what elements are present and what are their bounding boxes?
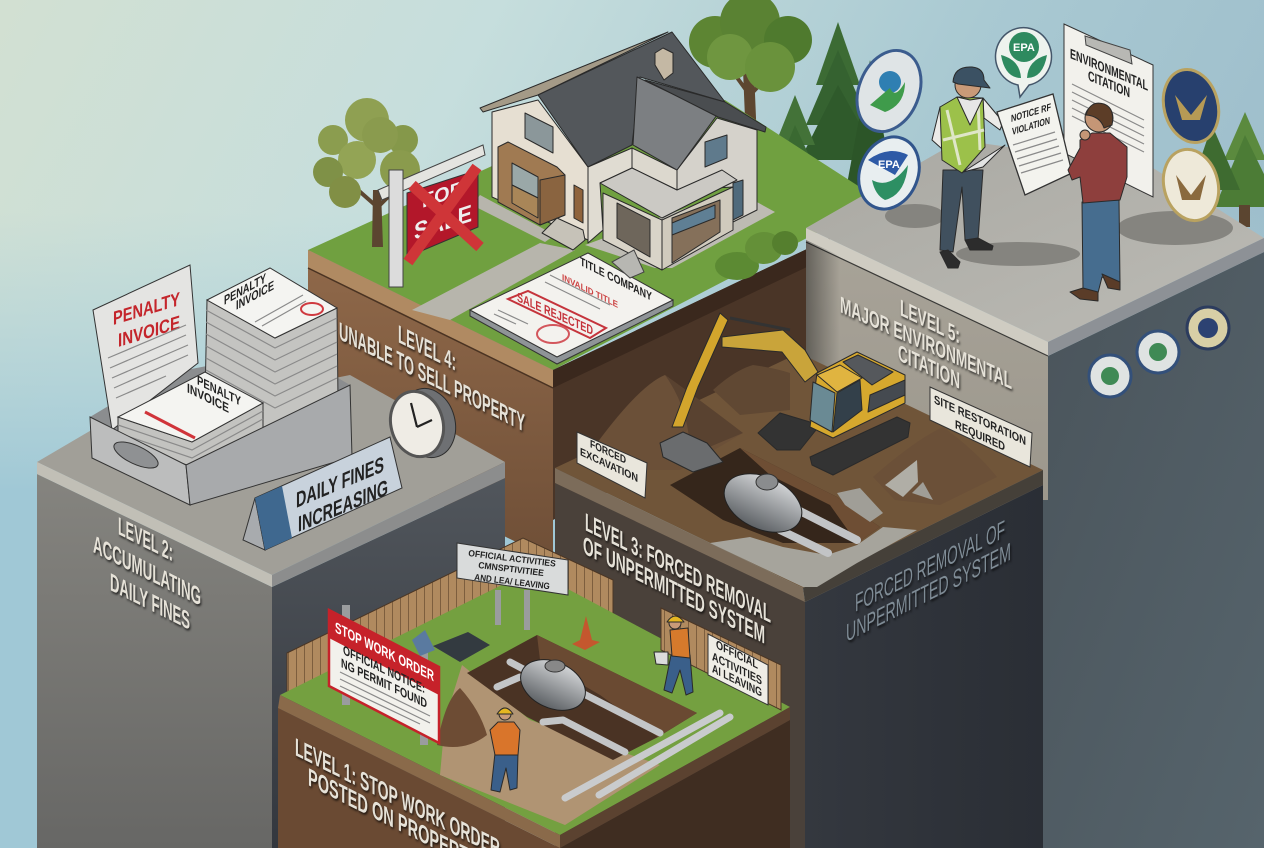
bucket [660,432,723,472]
title company clipboard: TITLE COMPANY [580,254,652,304]
EPA speech bubble [996,28,1052,97]
sandy ground [440,665,660,825]
metal tray and front stack: PENALTY [197,373,241,409]
official activities fence sign: ACTIVITIES [712,649,762,688]
stick [672,313,728,427]
excavation pit with tank [670,448,933,587]
chimney [655,48,673,80]
standing penalty invoice: INVOICE [118,312,180,352]
level 2 right face [272,478,505,848]
level 2 label: ACCUMULATING [93,529,201,612]
garage block [603,193,662,270]
site restoration sign: REQUIRED [955,418,1005,454]
yellow excavator [660,313,910,475]
level 3 right dark face [805,485,1043,848]
level 1 label [295,732,500,848]
stop work order sign: STOP WORK ORDER [335,620,434,685]
level 2 label: LEVEL 2: [118,511,173,567]
standing penalty invoice: PENALTY [113,288,180,330]
for sale sign crossed out: FOR [422,177,464,213]
for sale sign crossed out [378,145,485,287]
level 5 left face [806,240,1048,848]
tall invoice stack: PENALTY [224,270,266,308]
notice of violation paper [997,94,1072,195]
seal 3 [1156,64,1226,148]
flat porch roof [600,168,737,218]
level 5 top slab [806,140,1264,342]
stop work order sign: OFFICIAL NOTICE: [343,643,425,696]
level 1 right soil [560,720,790,848]
forced excavation sign [577,432,647,498]
level 3 block [555,353,1043,848]
EPA seals left: EPA [878,159,900,171]
dirt mounds [597,365,997,505]
metal tray and front stack: INVOICE [187,381,229,416]
level 5 label: CITATION [898,340,960,395]
stop work order sign [329,605,439,745]
tracks [758,413,820,450]
tray interior [90,350,350,463]
driveway and path [412,243,575,320]
seal 2 [848,128,930,218]
level 4 right soil face [553,238,830,520]
level 5 side decals [1089,307,1229,397]
right wing wall [677,118,757,222]
tree left of house [313,98,420,247]
for sale sign crossed out: SALE [414,200,472,246]
environmental citation clipboard: ENVIRONMENTAL [1070,46,1148,95]
level 5 right face [1040,252,1264,848]
worker with tablet [664,655,693,695]
house [480,32,766,270]
notice of violation paper: VIOLATION [1012,116,1050,138]
broken concrete [710,527,917,587]
right face label: FORCED REMOVAL OF [855,514,1005,618]
gable roof [633,77,717,170]
daily fines increasing sign: DAILY FINES [296,451,384,513]
property owner figure [1068,103,1127,301]
official activities fence sign: OFFICIAL [716,637,758,672]
forced excavation sign: FORCED [590,438,626,467]
tall invoice stack [205,268,338,440]
brown entry block [498,142,565,225]
standing penalty invoice [93,265,198,430]
shrubs [715,231,798,280]
stop work order sign: NG PERMIT FOUND [341,656,427,711]
tan back roof [480,32,668,112]
tall invoice stack: INVOICE [236,277,274,313]
loose pipes [565,713,730,798]
back fence [287,538,613,695]
site restoration sign [930,387,1032,467]
level 3 dirt top [555,353,1043,588]
upper body [810,352,905,438]
level 3 label [583,507,771,650]
level 3 label: LEVEL 3: FORCED REMOVAL [585,507,771,629]
right face label [846,514,1011,648]
level 4 label: UNABLE TO SELL PROPERTY [339,316,525,438]
level 4 left soil face [308,250,553,560]
level 4 label [339,316,525,438]
level 5 label: MAJOR ENVIRONMENTAL [840,292,1012,395]
level 1 grass top [280,570,790,835]
worker in vest [491,753,518,792]
entry steps [542,218,585,250]
level 5 label: LEVEL 5: [900,295,960,349]
trench and tank [467,635,697,760]
level 1 block [278,538,790,848]
level 5 pillar [806,140,1264,848]
inspector figure [932,67,1005,268]
seal 4 [1156,144,1226,226]
EPA speech bubble: EPA [1013,42,1035,54]
level 1 left soil [278,708,560,848]
seal 1 [845,41,933,141]
official activities fence sign: AI LEAVING [712,661,762,700]
boom [722,330,818,382]
dark main roof [538,32,725,167]
cone and utility box [412,616,600,662]
trees behind house [689,0,895,195]
official activities sign back: CMNSPTIVITIEE [478,560,544,578]
daily fines increasing sign [243,437,402,550]
right face label: UNPERMITTED SYSTEM [846,537,1011,648]
notice of violation paper: NOTICE RF [1011,102,1051,125]
left wing wall [492,100,588,240]
forced excavation sign: EXCAVATION [580,446,638,485]
EPA seals left [845,41,933,218]
title company clipboard [470,250,673,364]
level 4 label: LEVEL 4: [398,319,456,377]
figure shadows on slab [885,204,1233,266]
level 2 label [93,511,201,636]
level 5 trees right [1190,112,1264,227]
level 2 left face [37,474,272,848]
center wall [588,148,632,243]
pines behind [768,22,895,195]
level 3 label: OF UNPERMITTED SYSTEM [583,530,765,650]
official activities sign back [457,543,568,630]
environmental citation clipboard [1064,24,1153,197]
level 2 pillar [37,375,505,848]
level 4 grass top [308,100,880,370]
level 4 block: house plot [308,100,880,560]
level 2 label: DAILY FINES [110,567,190,636]
title company clipboard: INVALID TITLE [562,272,618,311]
daily fines increasing sign: INCREASING [298,474,388,537]
official activities sign back: OFFICIAL ACTIVITIES [468,548,556,569]
level 2 top [37,375,505,575]
site restoration sign: SITE RESTORATION [934,393,1026,448]
clock [383,382,463,464]
official activities fence sign [661,608,781,710]
title company clipboard: SALE REJECTED [517,290,593,338]
level 5 label [840,292,1012,395]
workers [490,616,693,792]
official activities sign back: AND LEA/ LEAVING [474,572,550,591]
large leafy tree [689,0,812,118]
environmental citation clipboard: CITATION [1088,68,1130,101]
dirt pile [437,688,487,747]
government seals right [1156,64,1226,226]
metal tray and front stack [90,372,352,505]
level 3 left face [555,483,805,848]
